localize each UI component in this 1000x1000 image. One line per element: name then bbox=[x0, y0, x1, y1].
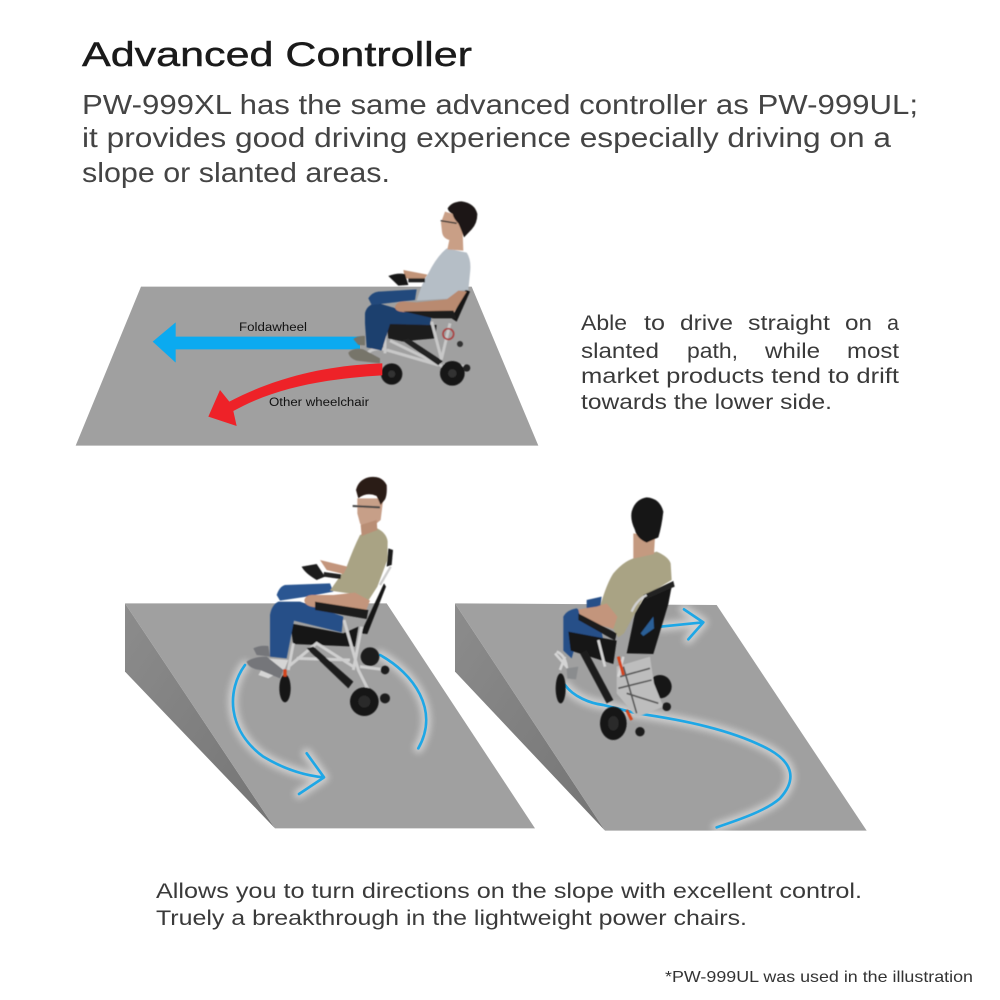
side description text: path, bbox=[687, 340, 738, 363]
ramp side bbox=[455, 603, 605, 831]
side description text: while bbox=[764, 340, 820, 363]
S-curve blue arrow bbox=[565, 609, 790, 827]
bottom caption bbox=[156, 879, 862, 930]
side description text: market products tend to drift bbox=[581, 365, 899, 388]
person on wheelchair, side view bbox=[348, 201, 477, 386]
side description text: straight bbox=[748, 312, 830, 335]
bottom caption: Truely a breakthrough in the lightweight power chairs. bbox=[156, 906, 747, 930]
side description text: slanted bbox=[581, 340, 659, 363]
title: Advanced Controller bbox=[82, 36, 472, 74]
person on wheelchair, rear view bbox=[555, 497, 675, 740]
side description text: to bbox=[644, 312, 665, 335]
panel: S-curve path on slope bbox=[455, 497, 867, 831]
side description text: most bbox=[847, 340, 899, 363]
panel: straight driving on slanted path bbox=[76, 201, 538, 446]
grey ground plane bbox=[76, 287, 538, 446]
side description text: a bbox=[887, 312, 899, 335]
label: Other wheelchair: Other wheelchair bbox=[269, 397, 369, 409]
side description text: Able bbox=[581, 312, 627, 335]
red arrow: other wheelchair bbox=[208, 363, 382, 426]
intro text: it provides good driving experience especially driving on a bbox=[82, 122, 892, 153]
wheels bbox=[279, 666, 390, 716]
wheels bbox=[381, 341, 470, 386]
intro text: slope or slanted areas. bbox=[82, 157, 390, 188]
panel: turning on slope bbox=[125, 477, 535, 828]
person on wheelchair, three-quarter front view bbox=[247, 477, 393, 716]
side description text: towards the lower side. bbox=[581, 391, 832, 414]
side description text: drive bbox=[680, 312, 733, 335]
ramp surface bbox=[455, 603, 867, 831]
side description text bbox=[581, 312, 899, 414]
intro text: PW-999XL has the same advanced controller as PW-999UL; bbox=[82, 89, 918, 120]
curved blue turning arrow bbox=[233, 655, 426, 794]
side description text: on bbox=[845, 312, 872, 335]
footnote: *PW-999UL was used in the illustration bbox=[665, 969, 973, 986]
blue arrow: Foldawheel bbox=[153, 322, 360, 363]
wheels bbox=[556, 673, 671, 740]
label: Foldawheel: Foldawheel bbox=[239, 322, 307, 334]
bottom caption: Allows you to turn directions on the slope with excellent control. bbox=[156, 879, 862, 903]
ramp surface bbox=[125, 603, 535, 828]
ramp side bbox=[125, 603, 275, 828]
intro text bbox=[82, 89, 918, 188]
